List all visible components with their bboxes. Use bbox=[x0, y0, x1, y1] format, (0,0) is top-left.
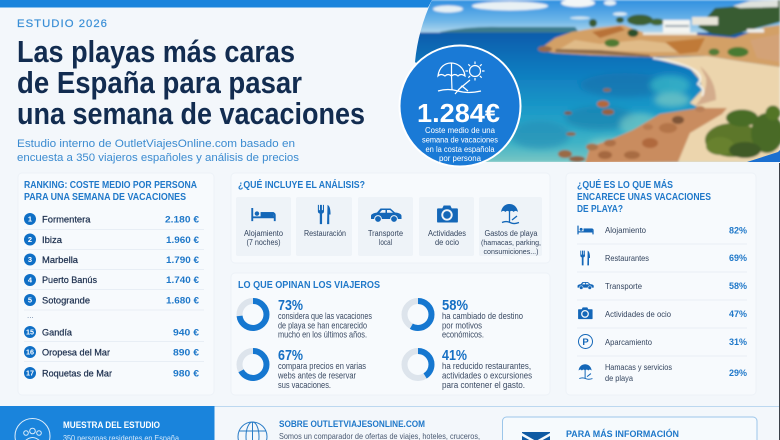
stat: 73%: de playa se han encarecido bbox=[278, 320, 367, 330]
stat: 41%: ha reducido restaurantes, bbox=[442, 361, 531, 371]
stat: 73% bbox=[240, 297, 372, 340]
factor: actividades de ocio: Actividades de ocio bbox=[605, 309, 671, 319]
factor: restaurantes: 69% bbox=[729, 253, 748, 264]
factor: actividades de ocio: 47% bbox=[729, 309, 748, 320]
stat: 67%: compara precios en varias bbox=[278, 361, 367, 371]
factor: hamacas: 29% bbox=[729, 368, 748, 379]
card: gastos de playa: (hamacas, parking, bbox=[481, 238, 541, 247]
card: actividades: Actividades bbox=[428, 229, 466, 238]
card: actividades: de ocio bbox=[435, 238, 460, 247]
factor: alojamiento: 82% bbox=[729, 226, 748, 236]
card: restauración bbox=[296, 197, 352, 256]
ranking row 15: 15 bbox=[26, 328, 34, 337]
pines bbox=[705, 123, 761, 157]
stat: 58%: 58% bbox=[442, 297, 468, 314]
stat: 41%: actividades o excursiones bbox=[442, 370, 533, 380]
ranking row 17: 980 € bbox=[173, 368, 200, 380]
callout badge: 1.284€: semana de vacaciones bbox=[422, 136, 498, 144]
stat: 58%: económicos. bbox=[442, 330, 484, 340]
card: gastos de playa: Gastos de playa bbox=[484, 229, 538, 238]
icon: globe bbox=[238, 422, 267, 440]
card: alojamiento bbox=[236, 197, 291, 256]
subtitle bbox=[17, 138, 299, 164]
factor: aparcamiento: P bbox=[582, 337, 589, 348]
stat: 67% bbox=[240, 347, 367, 390]
footer: sobre outletviajesonline bbox=[238, 419, 480, 440]
factor: alojamiento: Alojamiento bbox=[605, 225, 646, 235]
callout badge: 1.284€: por persona bbox=[439, 154, 482, 163]
cost factors heading: ¿QUÉ ES LO QUE MÁS bbox=[577, 178, 673, 191]
ranking heading: RANKING: COSTE MEDIO POR PERSONA bbox=[24, 180, 197, 191]
stat: 58%: por motivos bbox=[442, 320, 483, 330]
factor: aparcamiento bbox=[578, 334, 748, 348]
ranking row 17 bbox=[24, 367, 200, 380]
factor: transporte: 58% bbox=[729, 281, 748, 292]
panel: qué incluye el análisis bbox=[231, 173, 550, 263]
cost factors heading bbox=[577, 178, 711, 215]
title: Las playas más caras bbox=[17, 35, 295, 69]
ranking row 3: Marbella bbox=[42, 255, 79, 266]
beach bbox=[653, 56, 780, 162]
footer: contacto bbox=[502, 417, 757, 440]
footer: muestra del estudio: MUESTRA DEL ESTUDIO bbox=[63, 420, 160, 431]
card: transporte: local bbox=[379, 238, 392, 247]
stat: 41% bbox=[404, 347, 533, 390]
ranking row 3: 3 bbox=[28, 255, 32, 264]
card: transporte: Transporte bbox=[368, 229, 403, 238]
ranking row 15: Gandía bbox=[42, 328, 73, 338]
stat: 67%: webs antes de reservar bbox=[277, 370, 356, 380]
eyebrow: estudio 2026: ESTUDIO 2026 bbox=[17, 18, 108, 30]
factor: restaurantes: Restaurantes bbox=[605, 253, 649, 263]
footer: sobre outletviajesonline: SOBRE OUTLETVIAJESONLINE.COM bbox=[279, 419, 425, 430]
ranking row 5: Sotogrande bbox=[42, 296, 90, 306]
right edge strip bbox=[779, 163, 780, 440]
card: actividades bbox=[419, 197, 474, 256]
subtitle: encuesta a 350 viajeros españoles y análisis de precios bbox=[17, 152, 299, 164]
icon: beach umbrella and sun bbox=[438, 62, 484, 94]
ranking row 2: 1.960 € bbox=[166, 235, 200, 246]
card: gastos de playa: consumiciones...) bbox=[484, 247, 539, 256]
ranking row 1: Formentera bbox=[42, 214, 91, 226]
ranking row 1: 1 bbox=[28, 215, 32, 224]
ranking row 17: Roquetas de Mar bbox=[42, 368, 112, 380]
ranking row 2: Ibiza bbox=[42, 235, 63, 246]
ranking row 4: 1.740 € bbox=[166, 275, 200, 286]
factor: hamacas: Hamacas y servicios bbox=[605, 362, 672, 372]
stat: 67%: 67% bbox=[278, 347, 303, 364]
footer: muestra del estudio bbox=[0, 406, 214, 440]
card: restauración: Restauración bbox=[304, 229, 346, 238]
ranking row 5 bbox=[24, 294, 200, 306]
analysis heading: ¿QUÉ INCLUYE EL ANÁLISIS? bbox=[238, 178, 365, 191]
ranking row 5: 5 bbox=[28, 296, 32, 305]
title bbox=[17, 35, 365, 131]
cost factors heading: DE PLAYA? bbox=[577, 204, 623, 215]
card: alojamiento: Alojamiento bbox=[244, 229, 284, 238]
footer rule bbox=[214, 406, 780, 407]
ranking heading bbox=[24, 180, 197, 203]
ranking row 16: 16 bbox=[26, 348, 34, 357]
ranking row 5: 1.680 € bbox=[166, 296, 200, 306]
title: de España para pasar bbox=[17, 66, 302, 100]
ranking row 1: 2.180 € bbox=[165, 214, 200, 226]
villa bbox=[663, 20, 690, 33]
card: transporte bbox=[358, 197, 413, 256]
factor: restaurantes bbox=[580, 251, 748, 265]
vegetation bbox=[589, 19, 597, 27]
stat: 58% bbox=[404, 297, 523, 340]
stat: 73%: 73% bbox=[278, 297, 303, 314]
ranking row 1 bbox=[24, 213, 200, 226]
ranking row 2: 2 bbox=[28, 235, 32, 244]
factor: aparcamiento: Aparcamiento bbox=[605, 337, 652, 347]
icon: envelope bbox=[522, 432, 550, 440]
ranking row 15: 940 € bbox=[173, 328, 200, 338]
ranking heading: PARA UNA SEMANA DE VACACIONES bbox=[24, 192, 186, 203]
card: alojamiento: (7 noches) bbox=[246, 238, 281, 247]
ranking row 17: 17 bbox=[26, 369, 34, 378]
factor: transporte bbox=[578, 281, 748, 292]
callout badge: 1.284€: Coste medio de una bbox=[425, 126, 496, 135]
stat: 73%: mucho en los últimos años. bbox=[278, 330, 367, 340]
icon: people bbox=[15, 418, 50, 440]
factor: hamacas: de playa bbox=[605, 373, 633, 383]
factor: aparcamiento: 31% bbox=[729, 337, 748, 348]
factor: alojamiento bbox=[578, 225, 748, 236]
callout badge: 1.284€: en la costa española bbox=[426, 145, 495, 154]
callout badge: 1.284€ bbox=[400, 46, 520, 166]
factor: hamacas bbox=[579, 362, 748, 383]
panel: qué encarece las vacaciones bbox=[566, 173, 756, 395]
card: gastos de playa bbox=[479, 197, 542, 256]
stat: 41%: 41% bbox=[442, 347, 467, 364]
ranking row 16 bbox=[24, 346, 200, 358]
rocks bbox=[585, 108, 727, 163]
footer: contacto: PARA MÁS INFORMACIÓN bbox=[566, 428, 679, 440]
stat: 73%: considera que las vacaciones bbox=[278, 311, 372, 321]
ranking row 4: 4 bbox=[28, 276, 33, 285]
top blue bar bbox=[0, 0, 432, 8]
ranking row 3 bbox=[24, 254, 200, 266]
ranking row 2 bbox=[24, 234, 200, 246]
title: una semana de vacaciones bbox=[17, 97, 365, 131]
cost factors heading: ENCARECE UNAS VACACIONES bbox=[577, 192, 711, 203]
subtitle: Estudio interno de OutletViajesOnline.com basado en bbox=[17, 138, 295, 150]
hero photo: Mediterranean cove bbox=[410, 0, 780, 163]
ranking row 16: 890 € bbox=[173, 348, 200, 358]
callout badge: 1.284€: 1.284€ bbox=[417, 98, 500, 128]
ranking row 15 bbox=[24, 326, 200, 338]
ranking ellipsis: ... bbox=[27, 311, 34, 320]
opinions heading: LO QUE OPINAN LOS VIAJEROS bbox=[238, 280, 380, 291]
panel: lo que opinan los viajeros bbox=[231, 273, 550, 395]
panel: ranking bbox=[18, 173, 214, 395]
stat: 67%: sus vacaciones. bbox=[278, 380, 331, 390]
ranking row 4: Puerto Banús bbox=[42, 275, 97, 286]
stat: 41%: para contener el gasto. bbox=[442, 380, 525, 390]
ranking row 16: Oropesa del Mar bbox=[42, 348, 110, 358]
factor: transporte: Transporte bbox=[605, 281, 642, 291]
stat: 58%: ha cambiado de destino bbox=[442, 311, 523, 321]
ranking row 3: 1.790 € bbox=[166, 255, 200, 266]
factor: actividades de ocio bbox=[578, 307, 748, 320]
cliff bbox=[539, 25, 780, 67]
ranking row 4 bbox=[24, 274, 200, 286]
